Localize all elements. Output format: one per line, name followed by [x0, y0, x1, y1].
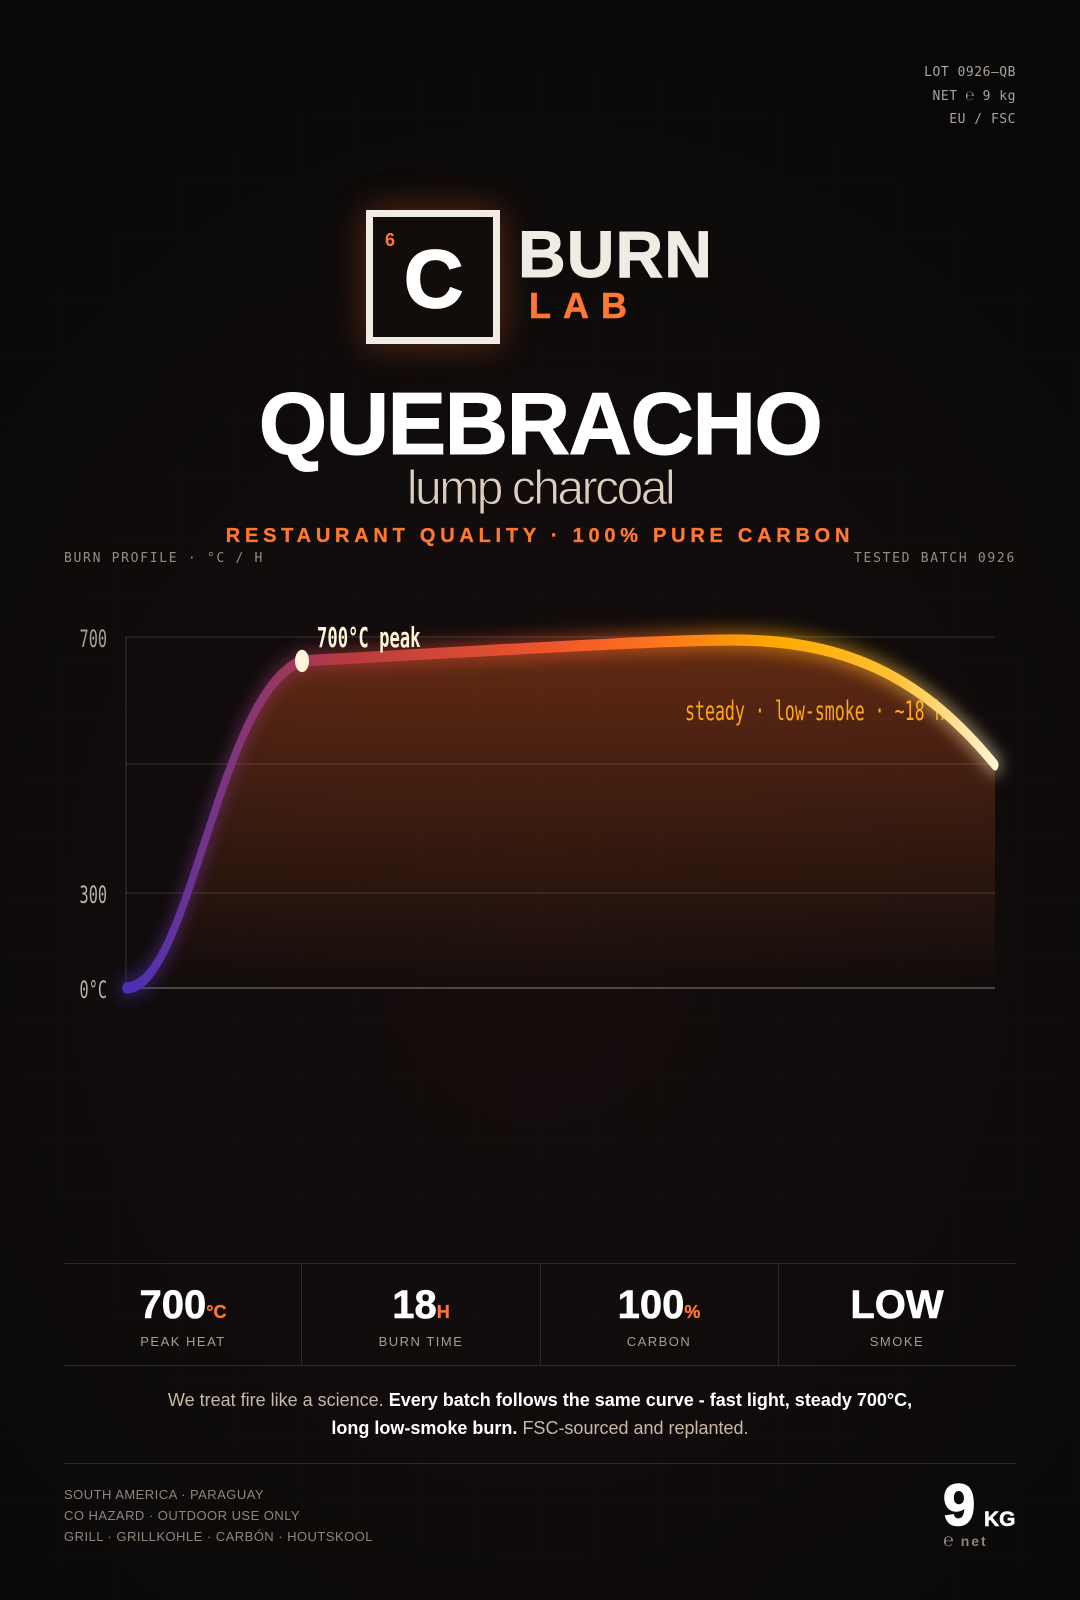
curve glow: [126, 640, 995, 988]
peak marker: [295, 650, 309, 672]
steady annotation: steady · low-smoke · ~18 h: [685, 696, 945, 727]
lot info: LOT 0926–QB: [924, 65, 1016, 80]
axis label 300: 300: [80, 880, 107, 909]
description: [168, 1390, 912, 1438]
curve line: [126, 640, 995, 988]
stat: carbon: [618, 1283, 700, 1349]
axis line at zero: [126, 987, 995, 989]
stat: burn time: 18H: [392, 1283, 450, 1327]
stat: burn time: [379, 1283, 463, 1349]
stat: peak heat: [140, 1283, 226, 1349]
element letter C: C: [404, 234, 463, 325]
footer info: GRILL · GRILLKOHLE · CARBÓN · HOUTSKOOL: [64, 1529, 373, 1544]
logo: element tile: [366, 210, 500, 344]
stat: smoke: SMOKE: [870, 1334, 924, 1349]
net weight: [943, 1473, 1016, 1550]
peak label: 700°C peak: [317, 623, 421, 654]
tagline: RESTAURANT QUALITY · 100% PURE CARBON: [226, 525, 854, 547]
chart label right: TESTED BATCH 0926: [854, 550, 1016, 566]
logo wordmark BURN: BURN: [518, 217, 713, 291]
title: QUEBRACHO: [259, 374, 821, 472]
atomic number: 6: [385, 230, 395, 250]
estimated net mark: ℮ net: [943, 1530, 988, 1550]
weight number: 9: [943, 1473, 975, 1538]
stat: smoke: [850, 1283, 944, 1349]
weight unit: KG: [984, 1508, 1016, 1531]
description: long low-smoke burn. FSC-sourced and replanted.: [331, 1418, 749, 1438]
lot info: EU / FSC: [949, 112, 1016, 127]
stat: carbon: 100%: [618, 1283, 700, 1327]
chart label left: BURN PROFILE · °C / H: [64, 550, 264, 566]
stat: burn time: BURN TIME: [379, 1334, 463, 1349]
axis label 0: 0°C: [80, 975, 107, 1004]
stat: peak heat: 700°C: [140, 1283, 226, 1327]
lot info: NET ℮ 9 kg: [933, 89, 1016, 104]
subtitle: lump charcoal: [407, 462, 673, 515]
area under curve: [126, 640, 995, 988]
lot info: [924, 65, 1016, 127]
stat: carbon: CARBON: [627, 1334, 691, 1349]
footer info: SOUTH AMERICA · PARAGUAY: [64, 1487, 264, 1502]
footer info: CO HAZARD · OUTDOOR USE ONLY: [64, 1508, 300, 1523]
description: We treat fire like a science. Every batch follows the same curve - fast light, steady 700°C,: [168, 1390, 912, 1410]
stat: smoke: LOW: [850, 1283, 944, 1327]
axis label 700: 700: [80, 624, 107, 653]
logo wordmark LAB: LAB: [529, 285, 639, 326]
stat: peak heat: PEAK HEAT: [140, 1334, 226, 1349]
footer info: [64, 1487, 373, 1544]
